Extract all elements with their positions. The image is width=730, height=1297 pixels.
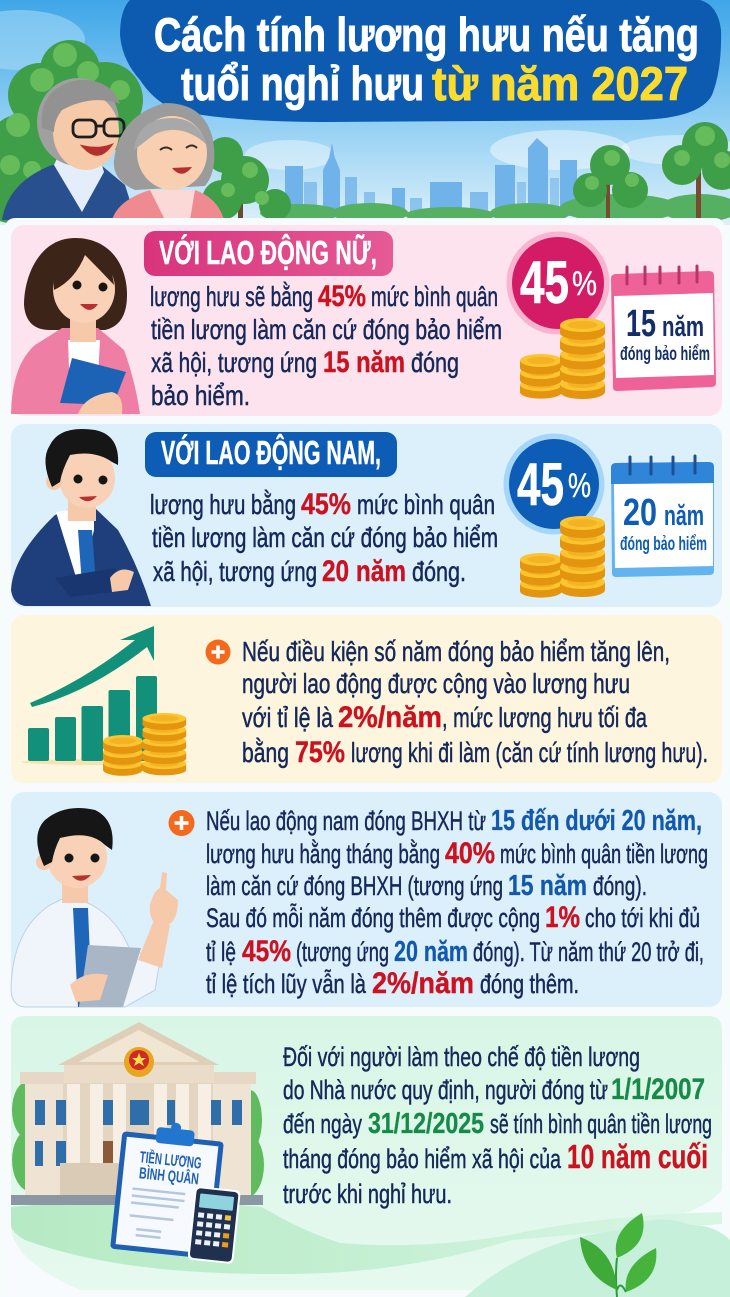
panel: male 15 to 20 years — [11, 792, 722, 1007]
city skyline — [285, 138, 577, 216]
text: male 15 to 20 years rule: đóng). — [593, 871, 647, 901]
illustration: calculator — [187, 1186, 241, 1264]
text: male 15 to 20 years rule: 45% — [242, 935, 291, 968]
illustration: clipboard — [110, 1117, 225, 1259]
text: male 15 to 20 years rule: Sau đó mỗi năm đóng thêm được cộng — [206, 903, 540, 933]
text: male rule: mức bình quân — [357, 489, 495, 520]
illustration: woman with book — [11, 238, 140, 414]
panel: extra years — [11, 615, 722, 783]
text: female rule: bảo hiểm. — [151, 380, 250, 411]
text: male rule: 45% — [301, 488, 351, 521]
text: male rule: xã hội, tương ứng — [153, 556, 317, 587]
text: male 15 to 20 years rule: tỉ lệ — [206, 937, 236, 967]
text: state payroll rule: đến ngày — [283, 1109, 363, 1139]
text: male 15 to 20 years rule: tỉ lệ tích lũy vẫn là — [206, 969, 366, 999]
illustration: man in suit — [11, 429, 151, 606]
elderly couple illustration — [2, 78, 224, 220]
text: extra years rule: bằng — [242, 737, 289, 768]
title text: tuổi nghỉ hưu — [181, 57, 424, 110]
heading pill: female — [144, 231, 393, 276]
heading pill: female: VỚI LAO ĐỘNG NỮ, — [159, 233, 377, 271]
text: male 15 to 20 years rule: 40% — [445, 837, 495, 870]
illustration: clipboard: TIỀN LƯƠNG — [139, 1147, 203, 1173]
text: state payroll rule: trước khi nghỉ hưu. — [283, 1179, 452, 1209]
text: extra years rule: 75% — [295, 736, 345, 769]
arrow — [30, 626, 154, 707]
illustration: man with tablet pointing — [11, 808, 178, 1007]
calendar: 20 years: 20 — [623, 492, 657, 534]
badge: 45 percent blue — [504, 434, 604, 534]
coins — [520, 516, 605, 598]
text: state payroll rule: 1/1/2007 — [611, 1073, 705, 1106]
text: female rule — [150, 280, 502, 411]
panel: male workers — [11, 424, 722, 607]
text: male rule: 20 năm — [322, 555, 406, 588]
bar chart with rising arrow — [21, 626, 189, 765]
icon: national emblem — [124, 1047, 154, 1077]
right trees — [573, 122, 730, 220]
text: female rule: đóng — [411, 347, 459, 378]
text: male 15 to 20 years rule: lương hưu hằng tháng bằng — [206, 839, 440, 869]
text: male rule: đóng. — [412, 556, 466, 587]
calendar: 15 years: năm — [662, 311, 704, 343]
centre left tree — [202, 137, 291, 221]
text: male rule: lương hưu bằng — [150, 489, 296, 520]
text: female rule: xã hội, tương ứng — [151, 347, 317, 378]
text: male 15 to 20 years rule: làm căn cứ đóng BHXH (tương ứng — [206, 871, 503, 901]
panel: female workers — [11, 225, 722, 416]
text: state payroll rule: tháng đóng bảo hiểm xã hội của — [283, 1144, 561, 1174]
illustration: clipboard: BÌNH QUÂN — [138, 1163, 200, 1188]
badge: 45 percent pink — [506, 232, 610, 334]
text: male rule — [150, 488, 498, 588]
calendar: 15 years: 15 — [626, 303, 656, 345]
illustration: government building — [11, 1022, 264, 1205]
calendar: 20 years: năm — [664, 500, 704, 532]
text: female rule: 15 năm — [323, 346, 405, 379]
badge: 45 percent blue: 45 — [517, 451, 564, 518]
text: female rule: lương hưu sẽ bằng — [150, 281, 313, 312]
background sky scene — [0, 0, 730, 225]
title text — [154, 8, 699, 110]
text: female rule: tiền lương làm căn cứ đóng bảo hiểm — [151, 314, 502, 345]
text: extra years rule: , mức lương hưu tối đa — [442, 702, 648, 733]
coins — [520, 318, 605, 399]
text: male 15 to 20 years rule: 20 năm — [394, 936, 468, 968]
text: male 15 to 20 years rule: Nếu lao động nam đóng BHXH từ — [206, 806, 486, 836]
text: female rule: 45% — [318, 280, 366, 313]
text: male 15 to 20 years rule — [206, 805, 708, 1000]
calendar: 20 years — [611, 456, 714, 577]
text: state payroll rule: 31/12/2025 — [368, 1108, 484, 1140]
icon: green plant — [580, 1213, 656, 1297]
title text: từ năm 2027 — [432, 57, 688, 110]
text: state payroll rule: do Nhà nước quy định, người đóng từ — [283, 1075, 608, 1105]
text: extra years rule — [242, 636, 708, 769]
low tree band — [260, 194, 730, 223]
coins — [103, 713, 186, 776]
heading pill: male: VỚI LAO ĐỘNG NAM, — [161, 433, 381, 471]
text: state payroll rule — [283, 1042, 712, 1209]
text: male 15 to 20 years rule: 2%/năm — [372, 967, 474, 1000]
heading pill: male — [145, 432, 397, 477]
text: male 15 to 20 years rule: đóng thêm. — [480, 969, 579, 999]
icon: plus — [206, 640, 230, 664]
badge: 45 percent pink: 45 — [520, 249, 569, 316]
badge: 45 percent pink: % — [572, 265, 597, 303]
title banner — [120, 0, 721, 122]
badge: 45 percent blue: % — [568, 467, 591, 505]
text: female rule: mức bình quân — [371, 281, 498, 312]
text: extra years rule: 2%/năm — [338, 701, 442, 734]
text: extra years rule: với tỉ lệ là — [242, 702, 334, 733]
text: male rule: tiền lương làm căn cứ đóng bảo hiểm — [152, 522, 498, 553]
icon: plus — [168, 810, 194, 836]
calendar: 15 years — [611, 266, 716, 391]
panel: state payroll — [11, 1016, 730, 1297]
text: male 15 to 20 years rule: 1% — [545, 901, 580, 934]
text: male 15 to 20 years rule: (tương ứng — [296, 937, 389, 967]
text: male 15 to 20 years rule: 15 năm — [508, 870, 587, 902]
left big tree — [0, 40, 147, 223]
decorative green hills — [11, 1201, 730, 1297]
